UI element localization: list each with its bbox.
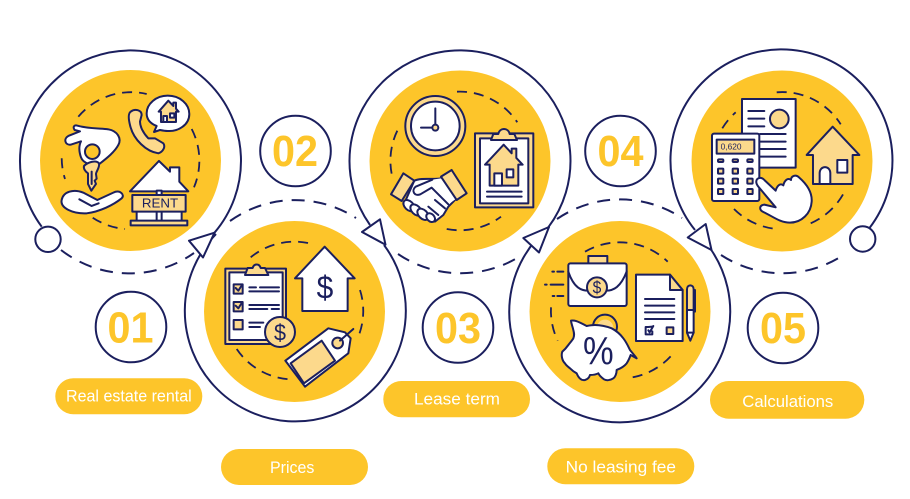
step 3 circle: lease term [349,50,570,273]
icon: piggy bank with percent: % [583,330,614,373]
icon: dollar coin: $ [274,319,286,345]
icon: telephone [129,110,164,153]
icon: open hand [62,191,123,213]
step 5 circle: calculations [670,49,892,273]
step 4 circle: no leasing fee [509,199,730,422]
icons: rental [62,96,189,225]
label: Calculations: Calculations [742,393,833,411]
number 04: 04 [598,127,644,176]
icon: price tag [285,328,353,387]
arrow: step 2 to 3 [362,219,386,245]
icon: clock [405,96,465,156]
icon: key [84,161,99,191]
number 05: 05 [760,304,806,353]
number 03 [423,292,493,363]
label: Calculations [710,381,864,419]
icons: prices [225,247,355,387]
end marker [850,226,875,252]
label: Lease term: Lease term [414,390,500,408]
number 01 [96,292,166,362]
icons: calculations [712,99,859,223]
label: No leasing fee [547,448,694,484]
label: Real estate rental [55,378,202,414]
label: Prices: Prices [270,459,314,477]
icon: house for rent: RENT [142,196,178,211]
icon: pen [687,285,695,341]
icon: piggy bank with percent [562,315,637,380]
number 02 [260,116,331,186]
step 2 circle: prices [185,200,406,421]
number 03: 03 [435,304,481,353]
label: Prices [221,449,368,485]
number 05 [748,293,818,363]
step 1 circle: real estate rental [20,50,241,273]
start marker [35,227,61,252]
icons: lease term [391,96,533,224]
icon: calculator: 0,620 [721,142,742,152]
icon: document [636,275,683,341]
icons: no leasing fee [545,256,695,380]
icon: briefcase with dollar [545,256,627,306]
arrow: step 4 to 5 [688,224,712,250]
icon: house [807,127,859,184]
number 02: 02 [272,127,318,176]
icon: handshake [391,170,467,224]
label: No leasing fee: No leasing fee [566,458,676,476]
icon: hand holding key [65,125,120,165]
icon: briefcase with dollar: $ [593,278,602,298]
icon: speech bubble with house [147,96,189,132]
label: Lease term [383,381,530,417]
arrow: step 1 to 2 [189,233,214,258]
icon: house with dollar: $ [317,268,333,305]
arrow: step 3 to 4 [523,227,549,252]
icon: pointing hand [756,176,812,223]
label: Real estate rental: Real estate rental [66,388,192,406]
icon: checklist clipboard [225,264,286,344]
icon: clipboard with house [475,129,533,207]
number 01: 01 [108,304,154,352]
number 04 [585,116,656,186]
icon: calculator [712,134,759,201]
icon: document with circle [742,99,796,168]
